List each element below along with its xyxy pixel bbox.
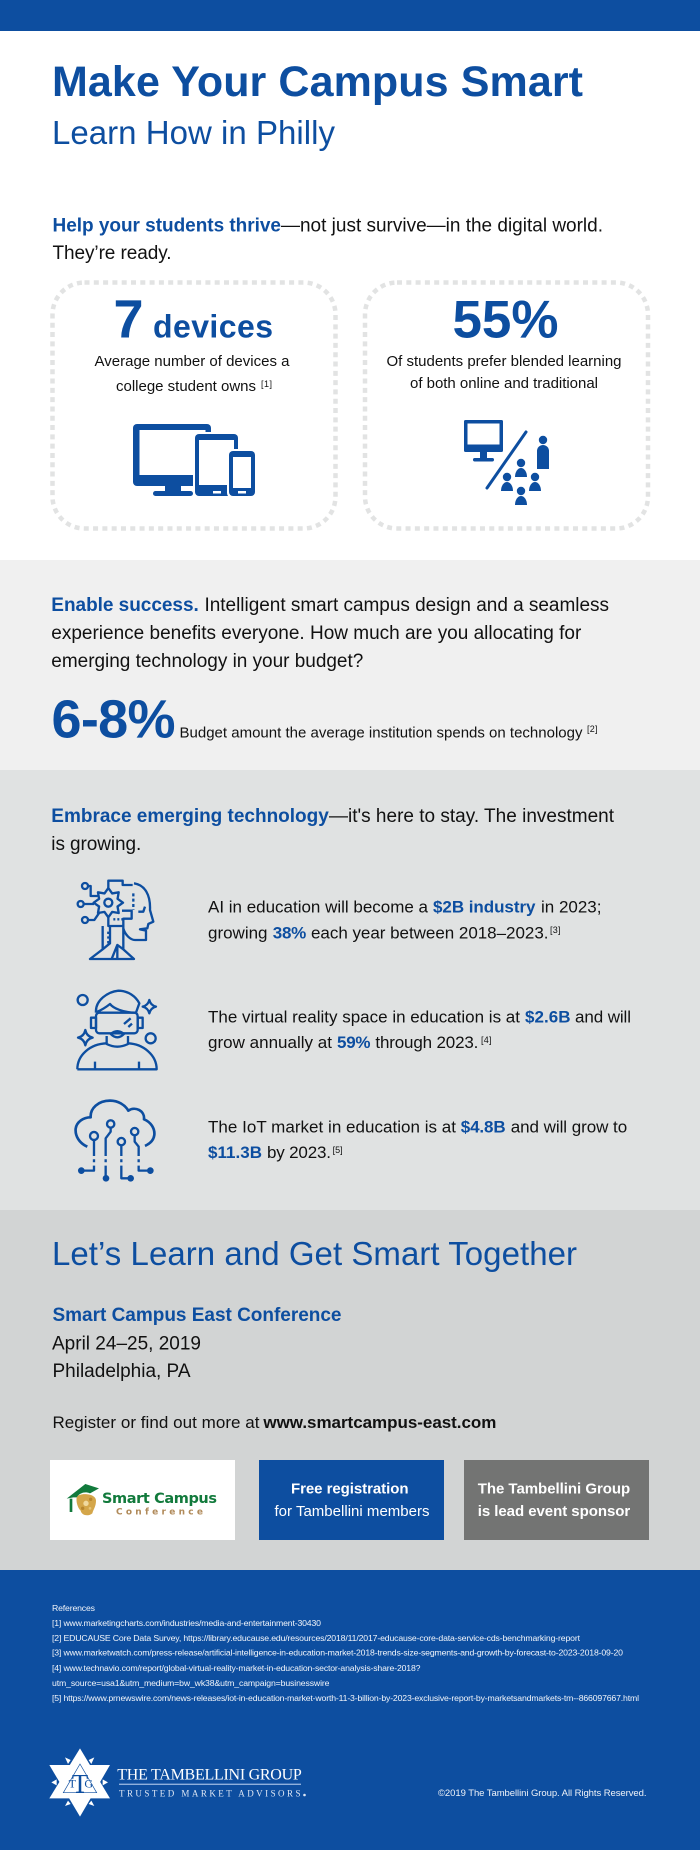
- icon: AI head with gear: [78, 881, 153, 959]
- text: virtual reality: 59%: [337, 1033, 370, 1052]
- text: IoT market: [5]: [333, 1145, 343, 1155]
- panel: embrace emerging technology: [0, 770, 700, 1210]
- panel: footer: [0, 1570, 700, 1850]
- icon: devices: [133, 424, 257, 498]
- logo: The Tambellini Group: [49, 1748, 306, 1817]
- paragraph: enable success: Enable success.: [51, 595, 199, 616]
- intro text: help your students thrive: [52, 216, 603, 264]
- text: AI in education: 38%: [273, 923, 306, 942]
- references: [5] https://www.prnewswire.com/news-releases/iot-in-education-market-worth-11-3-billion-by-2023-exclusive-report-by-marketsandmarkets-tm--866097667.html: [52, 1693, 639, 1703]
- logo mark: star: G: [84, 1776, 93, 1790]
- text: IoT market: by 2023.: [267, 1143, 331, 1162]
- paragraph: embrace emerging technology: —it's here to stay. The investment: [329, 806, 615, 827]
- text: AI in education: in 2023;: [541, 897, 602, 916]
- logo text: [102, 1491, 217, 1517]
- stat: 7 devices: 7: [114, 290, 144, 350]
- panel: enable success: [0, 560, 700, 770]
- box: lead event sponsor: The Tambellini Group: [478, 1481, 630, 1498]
- stat: 6-8%: 6-8%: [52, 690, 176, 750]
- conference details: April 24–25, 2019: [52, 1334, 201, 1355]
- card: 7 devices: [52, 282, 336, 528]
- title: Make Your Campus Smart: [52, 58, 583, 106]
- intro text: help your students thrive: Help your students thrive: [52, 216, 281, 236]
- intro text: help your students thrive: They’re ready.: [52, 243, 172, 264]
- logo mark: star: T: [72, 1768, 88, 1798]
- references: utm_source=usa1&utm_medium=bw_wk38&utm_campaign=businesswire: [52, 1678, 330, 1688]
- text: AI in education: $2B industry: [433, 897, 536, 916]
- text: AI in education: [3]: [550, 925, 560, 935]
- logo text: Smart Campus: [102, 1491, 217, 1507]
- card description: devices: [94, 353, 290, 395]
- text: IoT market: [208, 1117, 627, 1162]
- intro text: help your students thrive: —not just survive—in the digital world.: [281, 216, 603, 236]
- paragraph: enable success: Intelligent smart campus design and a seamless: [204, 595, 609, 616]
- registration line: www.smartcampus-east.com: [262, 1413, 496, 1432]
- text: virtual reality: grow annually at: [208, 1033, 332, 1052]
- registration line: [52, 1413, 496, 1432]
- paragraph: enable success: experience benefits everyone. How much are you allocating for: [51, 623, 582, 644]
- top bar: [0, 0, 700, 31]
- conference details: Smart Campus East Conference: [52, 1305, 342, 1326]
- icon: blended learning: [464, 420, 549, 505]
- stat: 55%: 55%: [452, 290, 558, 350]
- text: IoT market: $11.3B: [208, 1143, 262, 1162]
- box: lead event sponsor: is lead event sponsor: [478, 1503, 630, 1520]
- text: AI in education: AI in education will become a: [208, 897, 429, 916]
- text: AI in education: growing: [208, 923, 268, 942]
- icon: person with VR headset: [77, 991, 157, 1069]
- references: [4] www.technavio.com/report/global-virtual-reality-market-in-education-sector-analysis-share-2018?: [52, 1663, 421, 1673]
- subtitle: Learn How in Philly: [52, 114, 336, 151]
- icon: IoT cloud circuit: [76, 1101, 154, 1182]
- logo box: Smart Campus Conference: [50, 1460, 235, 1540]
- card description: devices: [1]: [261, 379, 272, 389]
- text: IoT market: $4.8B: [461, 1117, 506, 1136]
- card description: blended learning: Of students prefer blended learning: [386, 353, 622, 370]
- logo mark: graduation cap and head: [67, 1484, 99, 1515]
- references: References: [52, 1603, 96, 1613]
- card description: devices: college student owns: [116, 378, 256, 395]
- stat caption: budget amount: [2]: [587, 724, 598, 734]
- card description: blended learning: of both online and traditional: [410, 375, 598, 392]
- references: [3] www.marketwatch.com/press-release/artificial-intelligence-in-education-market-2018-trends-size-segments-and-growth-by-forecast-to-2023-2018-09-20: [52, 1648, 623, 1658]
- logo text: Conference: [116, 1507, 203, 1517]
- logo mark: star: [49, 1748, 110, 1817]
- box: free registration: Free registration: [291, 1481, 408, 1498]
- paragraph: embrace emerging technology: [51, 806, 615, 855]
- text: AI in education: [208, 897, 602, 942]
- conference details: [52, 1305, 342, 1382]
- logo wordmark: TRUSTED MARKET ADVISORS: [119, 1789, 300, 1799]
- logo wordmark: THE TAMBELLINI GROUP: [117, 1766, 302, 1783]
- stat caption: budget amount: Budget amount the average institution spends on technology: [180, 724, 583, 742]
- paragraph: embrace emerging technology: Embrace emerging technology: [51, 806, 329, 827]
- conference details: Philadelphia, PA: [52, 1361, 191, 1382]
- stat: 7 devices: devices: [153, 308, 273, 344]
- card: 55%: [365, 282, 648, 528]
- text: virtual reality: $2.6B: [525, 1008, 570, 1026]
- logo mark: star: T: [69, 1776, 77, 1790]
- references: [1] www.marketingcharts.com/industries/media-and-entertainment-30430: [52, 1618, 321, 1628]
- panel: conference: [0, 1210, 700, 1570]
- text: IoT market: and will grow to: [511, 1117, 627, 1136]
- box: lead event sponsor: [464, 1460, 649, 1540]
- text: virtual reality: [208, 1008, 631, 1052]
- logo wordmark: [117, 1766, 306, 1799]
- registration line: Register or find out more at: [52, 1413, 260, 1432]
- text: IoT market: The IoT market in education is at: [208, 1117, 456, 1136]
- card description: blended learning: [386, 353, 622, 392]
- card description: devices: Average number of devices a: [94, 353, 290, 370]
- box: free registration: [259, 1460, 444, 1540]
- copyright: ©2019 The Tambellini Group. All Rights Reserved.: [438, 1788, 646, 1799]
- paragraph: enable success: emerging technology in your budget?: [51, 651, 363, 672]
- text: AI in education: each year between 2018–2023.: [311, 923, 548, 942]
- text: virtual reality: The virtual reality space in education is at: [208, 1008, 520, 1026]
- references: [52, 1603, 639, 1703]
- text: virtual reality: and will: [575, 1008, 631, 1026]
- text: virtual reality: [4]: [481, 1035, 492, 1045]
- text: virtual reality: through 2023.: [375, 1033, 478, 1052]
- stat: 7 devices: [114, 290, 273, 350]
- paragraph: enable success: [51, 595, 609, 672]
- heading: let's learn: Let’s Learn and Get Smart Together: [52, 1235, 577, 1272]
- paragraph: embrace emerging technology: is growing.: [51, 834, 141, 855]
- references: [2] EDUCAUSE Core Data Survey, https://library.educause.edu/resources/2018/11/2017-educause-core-data-service-cds-benchmarking-report: [52, 1633, 581, 1643]
- panel: header and student stats: [52, 58, 648, 528]
- box: free registration: for Tambellini members: [274, 1503, 430, 1520]
